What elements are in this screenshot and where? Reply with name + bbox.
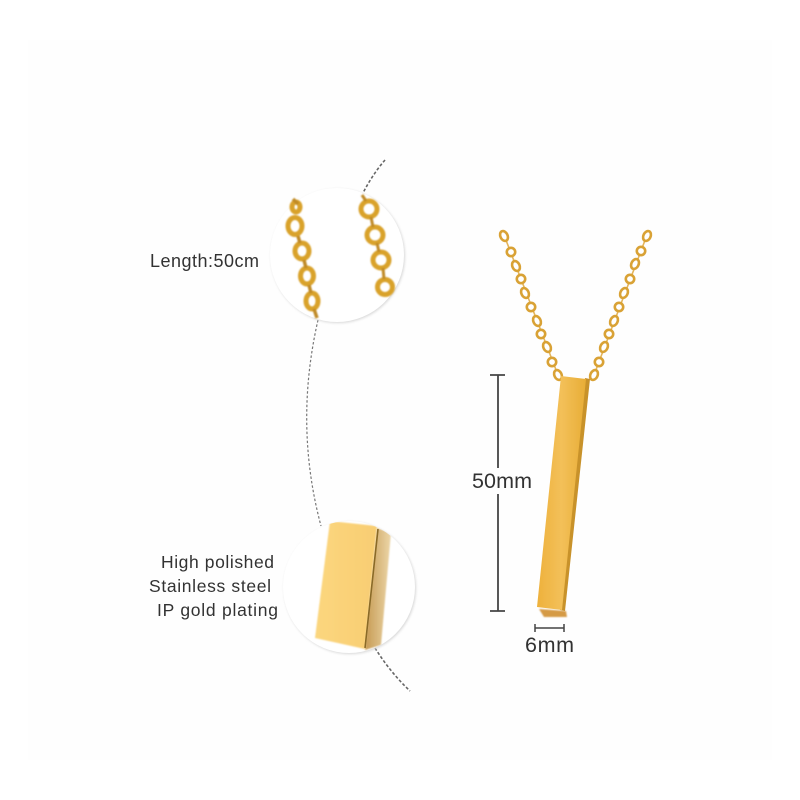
bar front face [315, 521, 377, 649]
pendant bar: inner opening [539, 609, 567, 617]
dimension: 6mm: 6mm [525, 633, 574, 657]
dimension: 50mm: 50mm [472, 469, 532, 493]
bar side shadow face [365, 528, 391, 650]
label: material [149, 552, 278, 620]
callout: polished bar detail [283, 521, 416, 654]
label: material: High polished [161, 552, 274, 572]
dashed connector: bottom of material callout [375, 648, 410, 691]
chain links: left strand [288, 199, 318, 318]
label: material: IP gold plating [157, 600, 278, 620]
chain: left strand [499, 230, 563, 381]
label: length: Length:50cm [150, 251, 259, 271]
chain: right strand [589, 230, 652, 381]
chain links: right strand [361, 195, 392, 294]
dashed connector: between callouts [307, 320, 321, 526]
pendant bar: side face [560, 378, 590, 611]
necklace illustration [499, 230, 652, 617]
pendant bar: front face [537, 376, 586, 610]
dashed connector: top of length callout [362, 160, 385, 195]
bar dark edge [365, 529, 378, 648]
callout: chain detail [270, 188, 405, 323]
dimension: 50mm [472, 375, 532, 611]
label: material: Stainless steel [149, 576, 271, 596]
